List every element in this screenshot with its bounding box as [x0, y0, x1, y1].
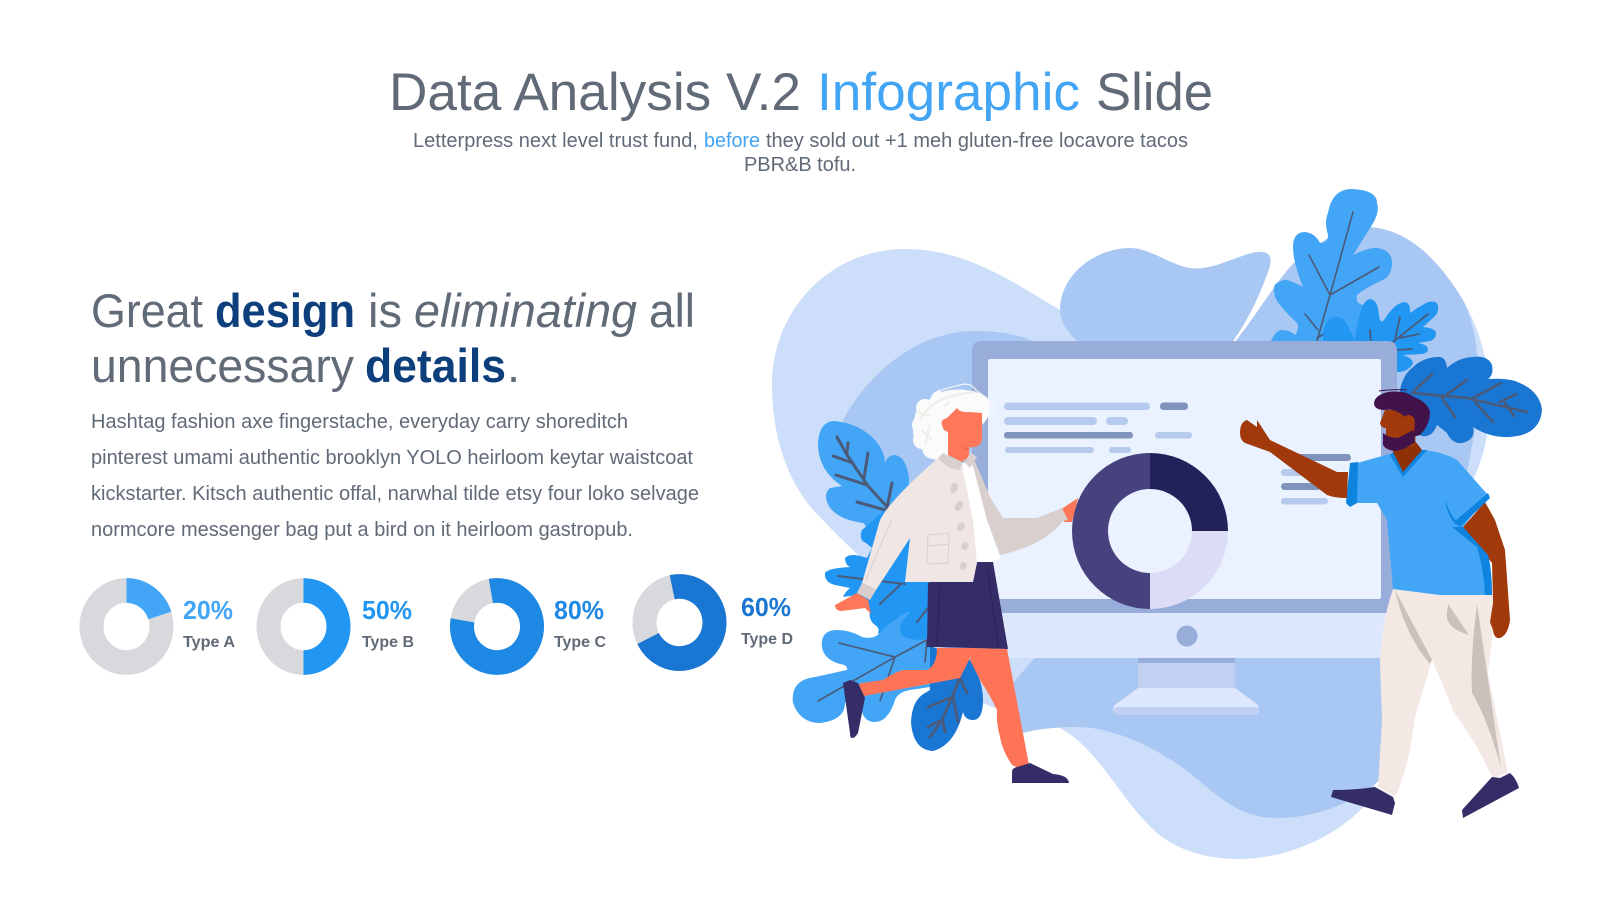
donut: Type C: 80% — [554, 595, 604, 625]
leaf: right — [1400, 357, 1542, 443]
heading: . — [507, 339, 520, 392]
monitor chin — [972, 600, 1397, 658]
subtitle — [413, 130, 1188, 176]
leaf: left middle — [825, 510, 935, 645]
monitor frame — [972, 341, 1397, 613]
man: shirt — [1350, 450, 1492, 595]
man: sleeve trims — [1346, 462, 1492, 595]
body paragraph: Hashtag fashion axe fingerstache, everyday carry shoreditch — [91, 411, 628, 433]
donut: Type A — [92, 590, 235, 663]
leaf: left upper — [818, 421, 909, 540]
subtitle: Letterpress next level trust fund, — [413, 130, 698, 152]
woman: collar — [938, 452, 977, 470]
subtitle: before — [704, 130, 760, 152]
heading: all — [649, 284, 695, 337]
leaf: left lower dark — [911, 645, 983, 751]
donut: Type C: Type C — [554, 634, 606, 651]
background blob: light — [772, 249, 1490, 859]
title: Slide — [1096, 63, 1213, 122]
person: woman — [835, 384, 1078, 783]
woman: hair — [912, 384, 994, 460]
background blob: top — [1060, 248, 1271, 341]
subtitle: they sold out +1 meh gluten-free locavore tacos — [766, 130, 1188, 152]
woman: buttons — [949, 482, 970, 571]
donut: Type D: Type D — [741, 631, 793, 648]
person: man — [1240, 390, 1519, 818]
donut: Type C — [456, 585, 606, 668]
heading — [91, 284, 695, 392]
man: front arm — [1240, 420, 1348, 498]
man: collar — [1390, 450, 1427, 477]
title — [389, 63, 1213, 122]
man: pants — [1378, 589, 1508, 797]
woman: front leg — [970, 648, 1029, 769]
body paragraph: pinterest umami authentic brooklyn YOLO heirloom keytar waistcoat — [91, 447, 693, 469]
donut: Type B — [268, 590, 414, 663]
woman: front foot — [1012, 763, 1069, 783]
woman: back leg — [857, 648, 975, 696]
body paragraph — [91, 411, 699, 541]
donut: Type B: Type B — [362, 634, 414, 651]
woman: far hand — [1060, 498, 1078, 522]
screen lines — [1004, 402, 1351, 504]
heading: eliminating — [414, 284, 637, 337]
background blob: middle — [843, 331, 1035, 600]
heading: unnecessary — [91, 339, 354, 392]
leaf: top large — [1271, 189, 1392, 345]
title: Infographic — [817, 63, 1080, 122]
woman: face — [942, 408, 982, 462]
donut: Type D: 60% — [741, 592, 791, 622]
donut: Type B: 50% — [362, 595, 412, 625]
body paragraph: normcore messenger bag put a bird on it heirloom gastropub. — [91, 519, 633, 541]
monitor screen — [988, 359, 1381, 599]
heading: Great — [91, 284, 203, 337]
man: neck and head — [1380, 410, 1422, 472]
illustration: presenters at a monitor — [772, 189, 1542, 859]
background blob: lower — [1005, 655, 1390, 818]
subtitle: PBR&B tofu. — [744, 154, 856, 176]
title: Data Analysis V.2 — [389, 63, 801, 122]
monitor — [972, 341, 1397, 715]
monitor stand — [1113, 658, 1259, 715]
donut: Type A: Type A — [183, 634, 235, 651]
heading: is — [368, 284, 402, 337]
woman: back foot — [843, 680, 865, 738]
leaf: left lower light — [793, 612, 930, 723]
woman: far sleeve — [973, 457, 1068, 555]
heading: details — [365, 339, 506, 392]
man: far arm — [1463, 502, 1510, 638]
man: beard — [1383, 430, 1415, 451]
donut: Type A: 20% — [183, 595, 233, 625]
woman: pocket — [927, 533, 949, 564]
woman: near hand — [835, 593, 871, 614]
screen donut chart — [1072, 453, 1228, 609]
background blob: right — [1235, 227, 1478, 520]
man: hair — [1374, 390, 1430, 437]
donut: Type D — [638, 580, 793, 665]
heading: design — [215, 284, 355, 337]
woman: cuff — [857, 583, 876, 600]
power button — [1176, 626, 1198, 646]
woman: shirt — [962, 462, 1000, 563]
woman: skirt — [927, 562, 1008, 649]
body paragraph: kickstarter. Kitsch authentic offal, narwhal tilde etsy four loko selvage — [91, 483, 699, 505]
leaf: top small — [1323, 299, 1438, 372]
man: shoes — [1331, 773, 1519, 818]
woman: coat — [857, 452, 977, 600]
